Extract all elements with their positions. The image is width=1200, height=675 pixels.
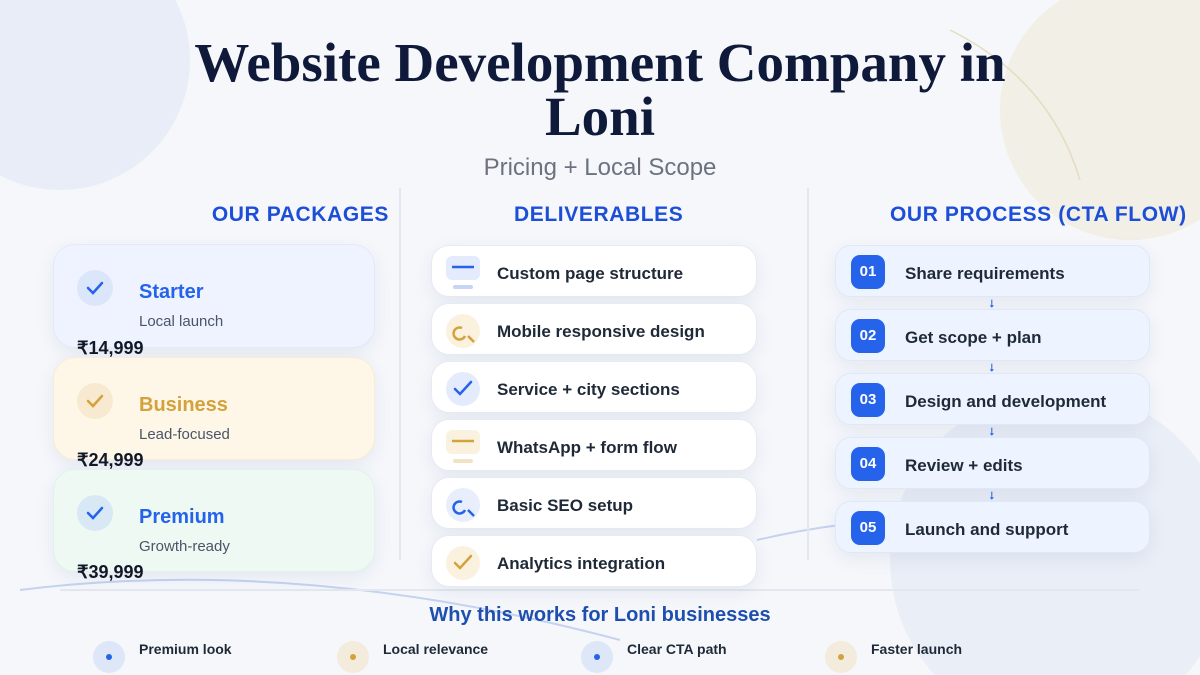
step 04: 04 <box>860 455 876 472</box>
step 01: 01 <box>860 263 876 280</box>
benefit: local relevance <box>337 641 488 673</box>
price: business: ₹24,999 <box>77 450 144 470</box>
package: business: Lead-focused <box>139 426 230 443</box>
arrow: ⭣ <box>989 490 995 502</box>
price: starter: ₹14,999 <box>77 338 144 358</box>
heading: our process: OUR PROCESS (CTA FLOW) <box>890 203 1187 226</box>
arrow: ⭣ <box>989 362 995 374</box>
item: custom page structure <box>431 245 757 297</box>
package: business <box>53 357 375 460</box>
package: starter: Local launch <box>139 313 223 330</box>
heading: deliverables: DELIVERABLES <box>514 203 683 226</box>
benefits row: Local relevance <box>383 641 488 657</box>
step 02 <box>835 309 1150 361</box>
benefits row: Faster launch <box>871 641 962 657</box>
item: whatsapp + form flow: WhatsApp + form flow <box>497 438 677 457</box>
benefits row <box>93 641 962 673</box>
step 05: Launch and support <box>905 520 1068 539</box>
item: custom page structure: Custom page structure <box>497 264 683 283</box>
panel: deliverables <box>348 245 757 673</box>
step 01 <box>835 245 1150 297</box>
step 02: 02 <box>860 327 876 344</box>
item: service + city sections: Service + city sections <box>497 380 680 399</box>
step 03: 03 <box>860 391 876 408</box>
package: starter <box>53 244 375 348</box>
title: Website Development Company in <box>194 32 1006 93</box>
title <box>194 32 1006 147</box>
benefits row: Clear CTA path <box>627 641 727 657</box>
arrow: ⭣ <box>989 426 995 438</box>
price: premium: ₹39,999 <box>77 562 144 582</box>
package: business: Business <box>139 394 228 416</box>
heading: our packages: OUR PACKAGES <box>212 203 389 226</box>
item: mobile responsive design <box>431 303 757 355</box>
step 01: Share requirements <box>905 264 1065 283</box>
title: Loni <box>545 86 655 147</box>
item: analytics integration <box>431 535 757 587</box>
item: basic seo setup <box>431 477 757 529</box>
panel: packages <box>53 244 375 582</box>
item: analytics integration: Analytics integration <box>497 554 665 573</box>
step 05 <box>835 501 1150 553</box>
package: premium <box>53 469 375 572</box>
heading: why this works: Why this works for Loni businesses <box>429 604 771 626</box>
step 02: Get scope + plan <box>905 328 1042 347</box>
benefit: premium look <box>93 641 232 673</box>
step 04: Review + edits <box>905 456 1023 475</box>
benefit: faster launch <box>825 641 962 673</box>
arrow: ⭣ <box>989 298 995 310</box>
panel: process <box>835 245 1150 559</box>
benefit: clear cta path <box>581 641 727 673</box>
step 05: 05 <box>860 519 876 536</box>
item: whatsapp + form flow <box>431 419 757 471</box>
step 04 <box>835 437 1150 489</box>
subtitle: Pricing + Local Scope <box>484 154 716 181</box>
package: starter: Starter <box>139 281 203 303</box>
item: mobile responsive design: Mobile responsive design <box>497 322 705 341</box>
item: service + city sections <box>431 361 757 413</box>
package: premium: Growth-ready <box>139 538 230 555</box>
package: premium: Premium <box>139 506 225 528</box>
item: basic seo setup: Basic SEO setup <box>497 496 633 515</box>
benefits row: Premium look <box>139 641 232 657</box>
step 03 <box>835 373 1150 425</box>
step 03: Design and development <box>905 392 1106 411</box>
